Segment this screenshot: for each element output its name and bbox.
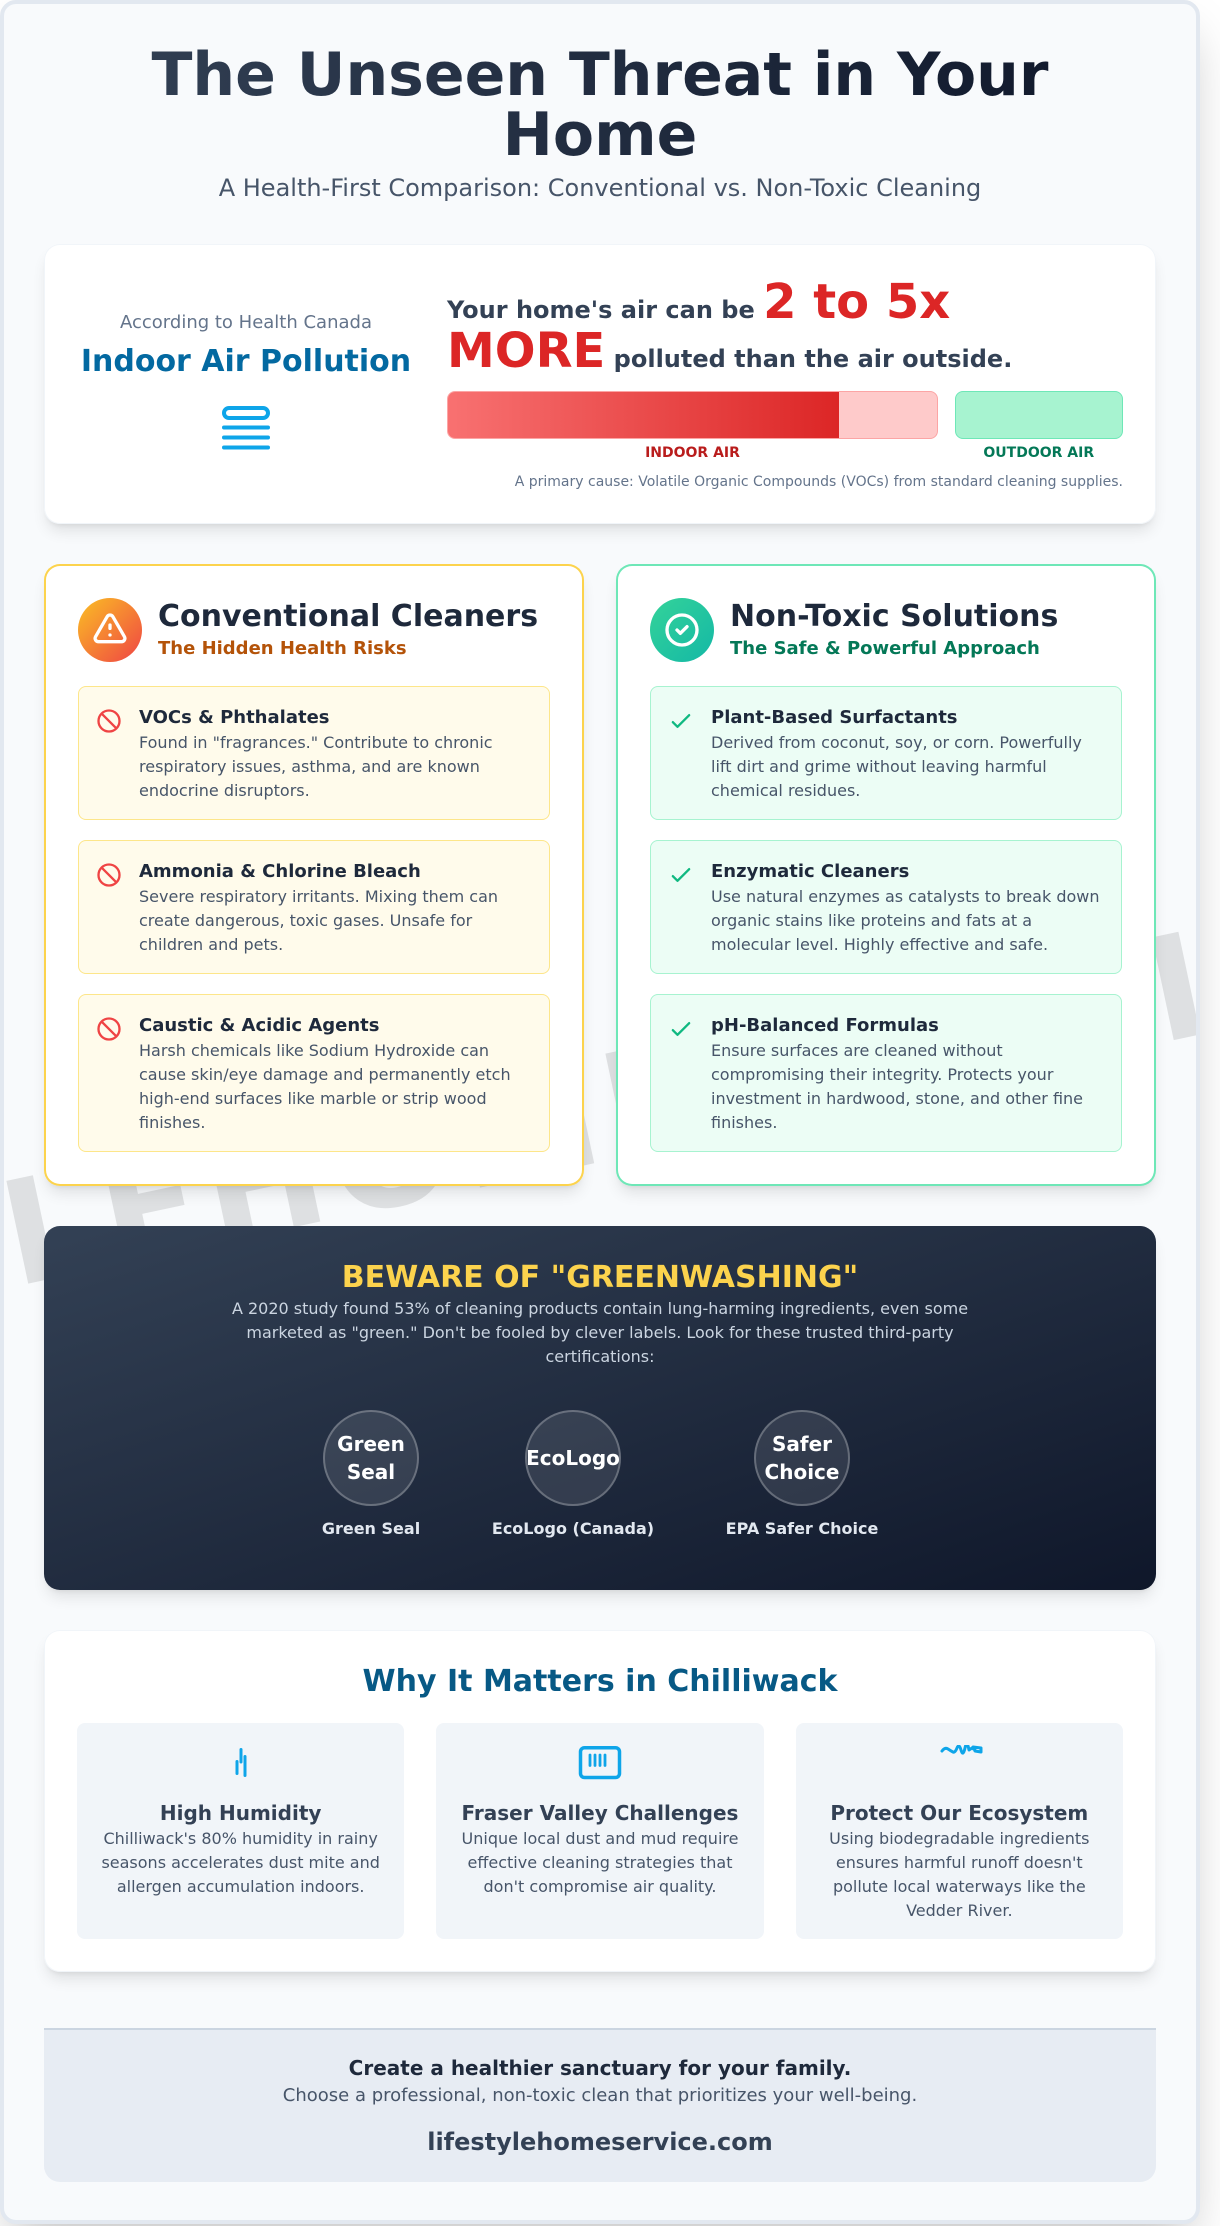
card: ecosystem — [796, 1723, 1123, 1939]
icon: prohibited — [97, 709, 121, 733]
item: VOCs: Found in "fragrances." Contribute to chronic — [139, 733, 493, 752]
panel heading: Indoor Air Pollution — [81, 344, 411, 379]
headline statistic — [446, 274, 1012, 378]
card: ecosystem: Protect Our Ecosystem — [830, 1801, 1088, 1825]
item: ammonia and bleach — [78, 840, 550, 974]
badge: Green Seal: Green — [337, 1432, 405, 1456]
icon: prohibited — [97, 863, 121, 887]
icon: warning — [78, 598, 142, 662]
label: indoor air: INDOOR AIR — [645, 445, 740, 461]
badge: Safer Choice — [754, 1410, 850, 1506]
description: marketed as "green." Don't be fooled by clever labels. Look for these trusted third-party — [246, 1323, 954, 1342]
badge: EcoLogo: EcoLogo — [526, 1446, 620, 1470]
item: pH-balanced formulas — [650, 994, 1122, 1152]
item: pH-balanced formulas: investment in hardwood, stone, and other fine — [711, 1089, 1083, 1108]
website: lifestylehomeservice.com — [427, 2128, 773, 2156]
headline statistic: Your home's air can be 2 to 5x — [447, 274, 950, 330]
item: enzymatic cleaners: Use natural enzymes as catalysts to break down — [711, 887, 1100, 906]
note: primary cause: A primary cause: Volatile Organic Compounds (VOCs) from standard cleaning supplies. — [515, 474, 1123, 490]
card: high humidity: allergen accumulation indoors. — [117, 1877, 364, 1896]
icon: prohibited — [97, 1017, 121, 1041]
badge: Green Seal: Seal — [347, 1460, 395, 1484]
item: pH-balanced formulas: pH-Balanced Formulas — [711, 1015, 939, 1036]
heading: Non-Toxic Solutions — [730, 599, 1058, 634]
card: high humidity — [77, 1723, 404, 1939]
icon: air filter — [222, 406, 270, 450]
icon: humidity — [236, 1748, 246, 1777]
icon: check — [672, 714, 690, 728]
card: ecosystem: ensures harmful runoff doesn't — [836, 1853, 1083, 1872]
icon: check — [672, 1022, 690, 1036]
card: ecosystem: Vedder River. — [906, 1901, 1013, 1920]
panel: non-toxic solutions — [616, 564, 1156, 1186]
card: Fraser Valley: don't compromise air quality. — [484, 1877, 716, 1896]
heading: Conventional Cleaners — [158, 599, 538, 634]
item: enzymatic cleaners: molecular level. Highly effective and safe. — [711, 935, 1048, 954]
supporting line: Choose a professional, non-toxic clean that prioritizes your well-being. — [283, 2085, 917, 2106]
icon: check — [672, 868, 690, 882]
item: VOCs — [78, 686, 550, 820]
item: ammonia and bleach: create dangerous, toxic gases. Unsafe for — [139, 911, 472, 930]
item: pH-balanced formulas: compromising their integrity. Protects your — [711, 1065, 1053, 1084]
description: A 2020 study found 53% of cleaning products contain lung-harming ingredients, even some — [232, 1299, 968, 1318]
badge: EcoLogo — [525, 1410, 621, 1506]
item: VOCs: VOCs & Phthalates — [139, 707, 330, 728]
item: caustic agents: Harsh chemicals like Sodium Hydroxide can — [139, 1041, 489, 1060]
badge: Safer Choice: Safer — [772, 1432, 832, 1456]
card: high humidity: seasons accelerates dust mite and — [101, 1853, 380, 1872]
item: ammonia and bleach: children and pets. — [139, 935, 283, 954]
card: Fraser Valley: Unique local dust and mud require — [462, 1829, 738, 1848]
icon: check badge — [650, 598, 714, 662]
badge: Green Seal — [323, 1410, 419, 1506]
panel: conventional cleaners — [44, 564, 584, 1186]
title: The Unseen Threat in Your — [152, 40, 1048, 110]
title — [60, 45, 1140, 165]
description: certifications: — [546, 1347, 654, 1366]
item: enzymatic cleaners: organic stains like proteins and fats at a — [711, 911, 1032, 930]
item: enzymatic cleaners: Enzymatic Cleaners — [711, 861, 909, 882]
footer — [44, 2028, 1156, 2182]
subheading: The Hidden Health Risks — [158, 638, 407, 659]
source label: According to Health Canada — [120, 312, 372, 333]
item: caustic agents: finishes. — [139, 1113, 205, 1132]
item: enzymatic cleaners — [650, 840, 1122, 974]
item: surfactants: chemical residues. — [711, 781, 860, 800]
item: caustic agents — [78, 994, 550, 1152]
panel: greenwashing — [44, 1226, 1156, 1590]
item: surfactants: Derived from coconut, soy, or corn. Powerfully — [711, 733, 1082, 752]
item: caustic agents: high-end surfaces like marble or strip wood — [139, 1089, 487, 1108]
call to action: Create a healthier sanctuary for your family. — [349, 2056, 851, 2080]
item: VOCs: endocrine disruptors. — [139, 781, 310, 800]
label: EcoLogo: EcoLogo (Canada) — [492, 1519, 654, 1538]
description — [232, 1299, 968, 1366]
label: Safer Choice: EPA Safer Choice — [726, 1519, 878, 1538]
item: caustic agents: Caustic & Acidic Agents — [139, 1015, 379, 1036]
card: ecosystem: pollute local waterways like the — [833, 1877, 1086, 1896]
item: surfactants: Plant-Based Surfactants — [711, 707, 958, 728]
card: high humidity: Chilliwack's 80% humidity in rainy — [103, 1829, 378, 1848]
headline statistic: MORE polluted than the air outside. — [447, 322, 1012, 378]
icon: water ripple — [940, 1745, 982, 1755]
label: Green Seal: Green Seal — [322, 1519, 420, 1538]
item: caustic agents: cause skin/eye damage and permanently etch — [139, 1065, 511, 1084]
panel: why it matters — [44, 1630, 1156, 1972]
item: surfactants: lift dirt and grime without leaving harmful — [711, 757, 1047, 776]
subheading: The Safe & Powerful Approach — [730, 638, 1040, 659]
badge: Safer Choice: Choice — [765, 1460, 839, 1484]
label: outdoor air: OUTDOOR AIR — [983, 445, 1094, 461]
item: ammonia and bleach: Severe respiratory irritants. Mixing them can — [139, 887, 498, 906]
card: Fraser Valley: effective cleaning strategies that — [468, 1853, 732, 1872]
item: pH-balanced formulas: Ensure surfaces are cleaned without — [711, 1041, 1003, 1060]
bar: indoor air — [447, 391, 938, 439]
subtitle: A Health-First Comparison: Conventional vs. Non-Toxic Cleaning — [219, 174, 981, 202]
panel: indoor air pollution — [44, 244, 1156, 524]
bar: outdoor air — [954, 391, 1123, 439]
icon: filter box — [578, 1746, 622, 1780]
item: pH-balanced formulas: finishes. — [711, 1113, 777, 1132]
card: Fraser Valley: Fraser Valley Challenges — [462, 1801, 738, 1825]
heading: BEWARE OF "GREENWASHING" — [342, 1260, 858, 1295]
card: ecosystem: Using biodegradable ingredients — [829, 1829, 1089, 1848]
card: high humidity: High Humidity — [160, 1801, 321, 1825]
card: Fraser Valley — [436, 1723, 764, 1939]
item: surfactants — [650, 686, 1122, 820]
title: Home — [503, 100, 697, 170]
item: VOCs: respiratory issues, asthma, and are known — [139, 757, 480, 776]
item: ammonia and bleach: Ammonia & Chlorine Bleach — [139, 861, 421, 882]
heading: Why It Matters in Chilliwack — [363, 1664, 837, 1699]
